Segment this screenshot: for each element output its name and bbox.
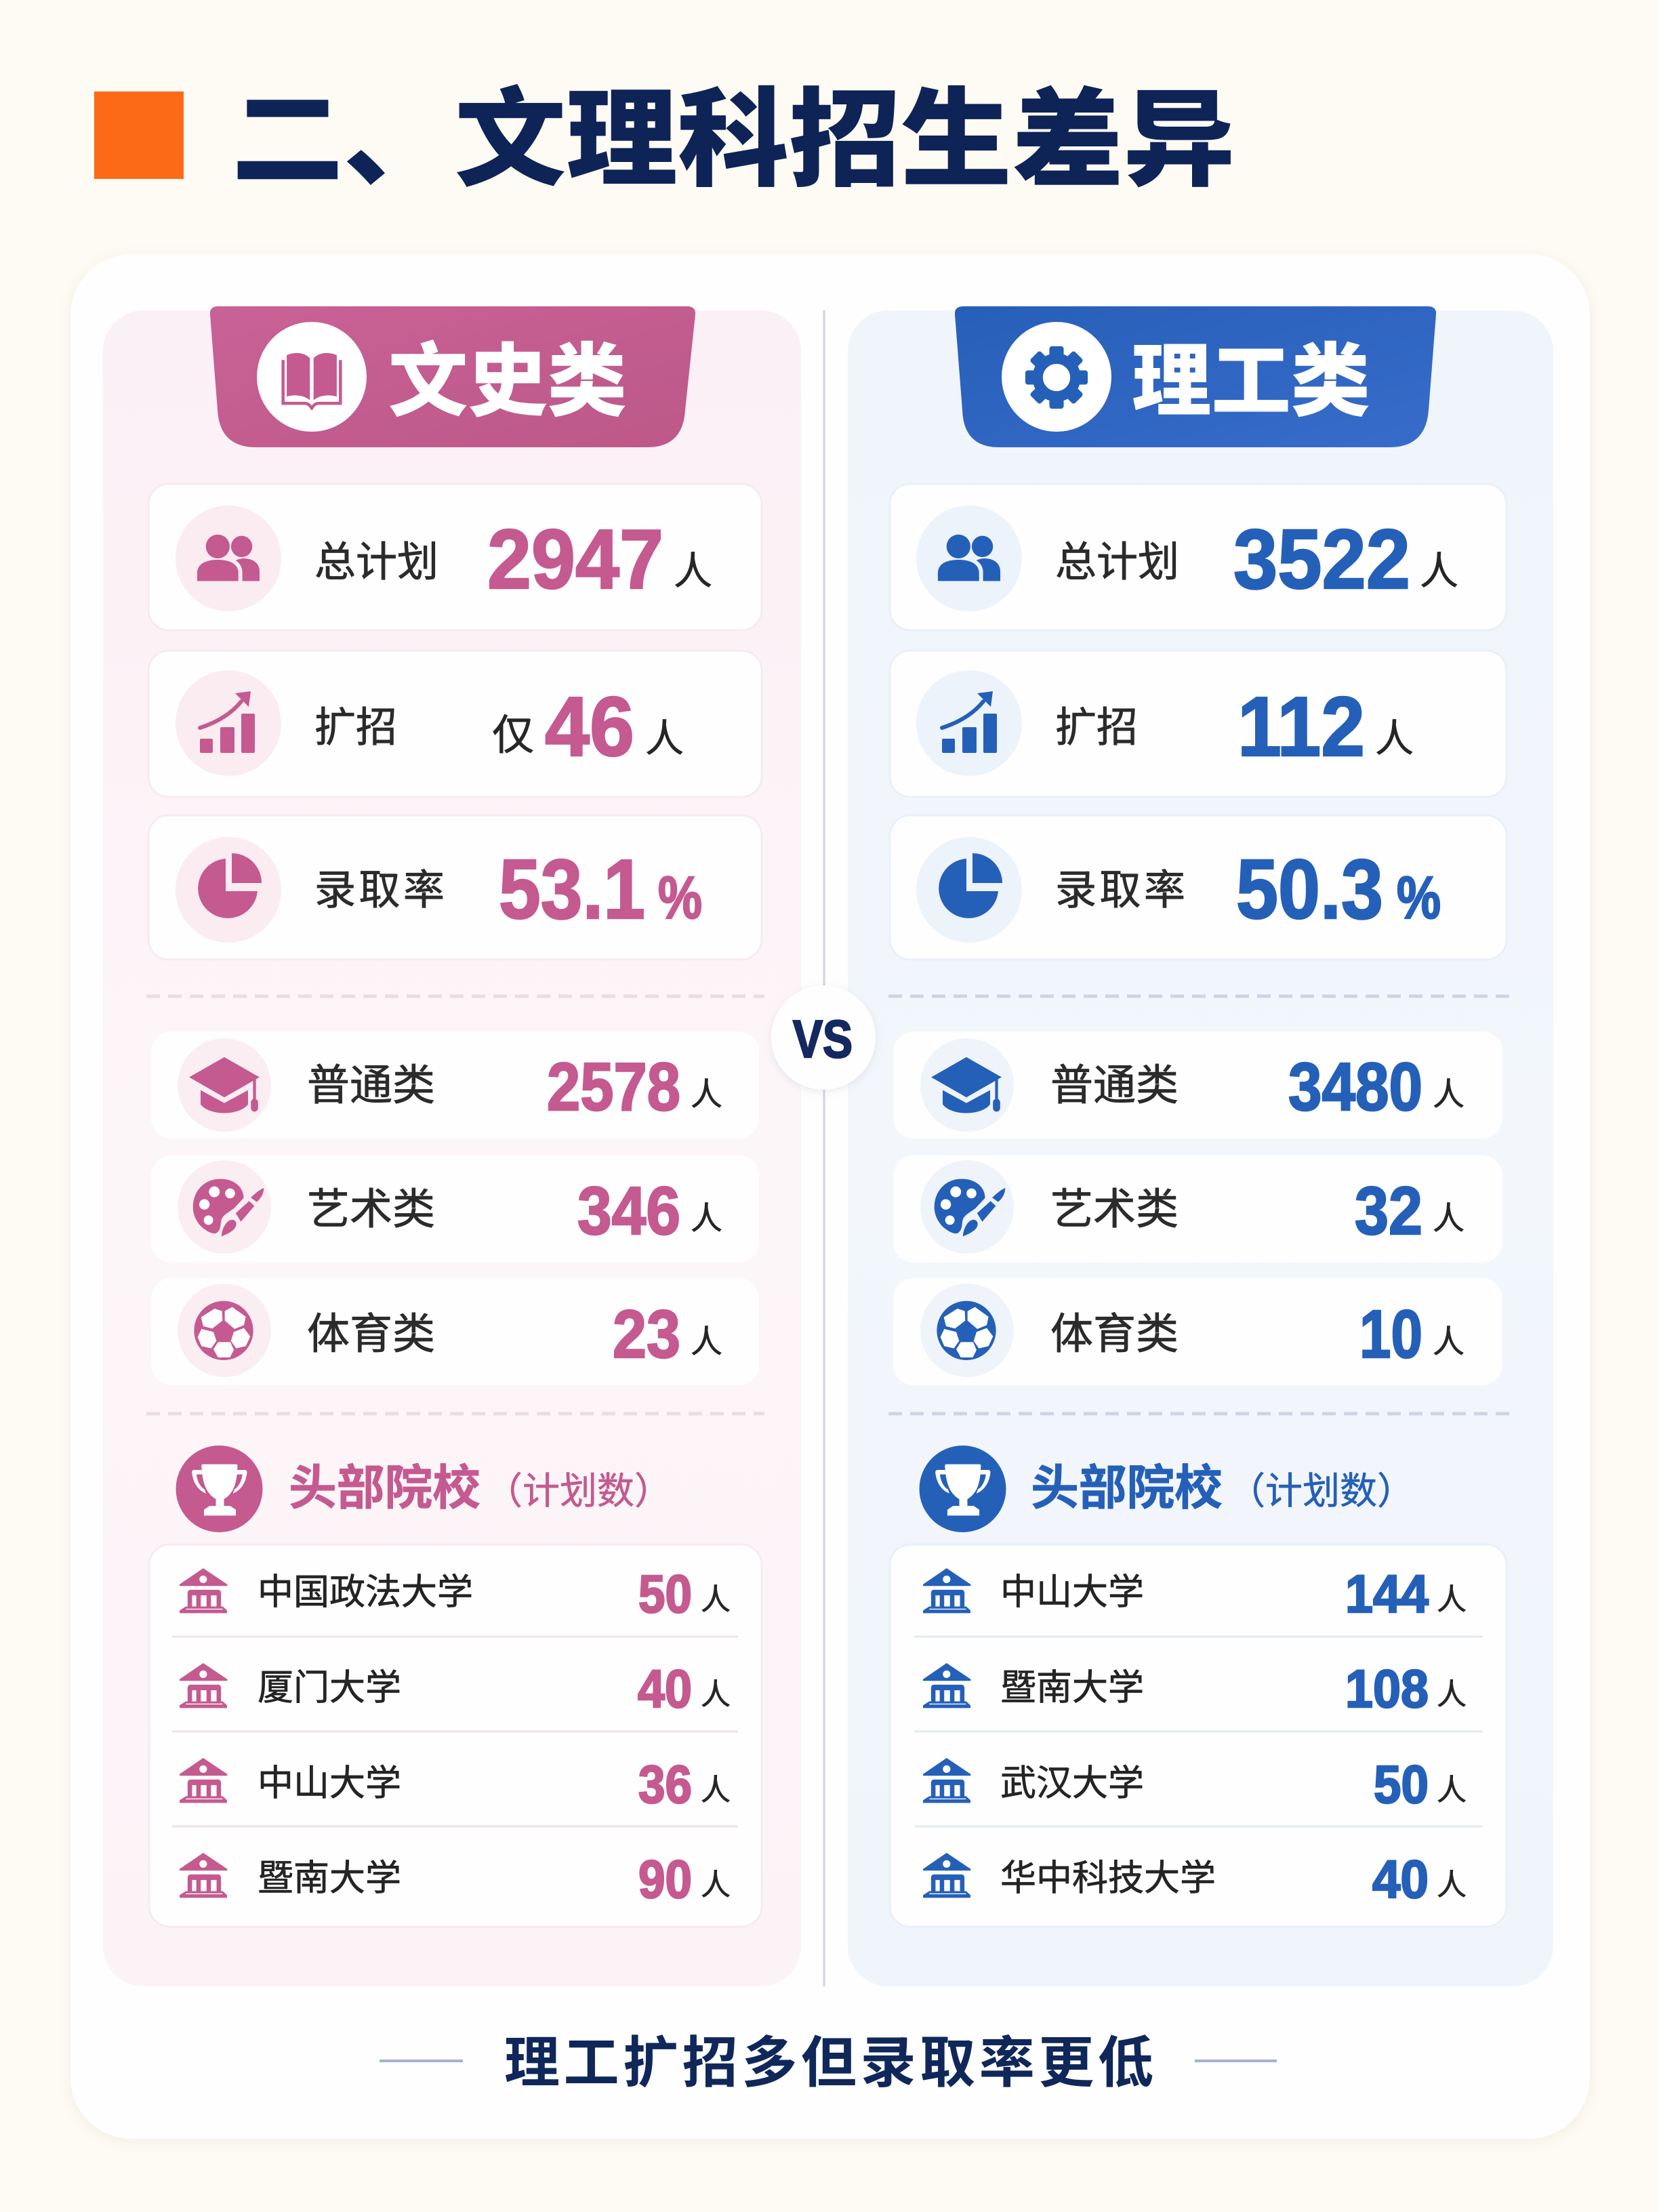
row: 体育类: [151, 1278, 759, 1385]
divider: [888, 995, 1509, 998]
stat card: 总计划: 人: [674, 550, 712, 593]
row: 艺术类: [893, 1155, 1502, 1263]
school row: 暨南大学: 90: [638, 1849, 692, 1909]
school row: 暨南大学: 人: [1437, 1678, 1467, 1711]
row: 体育类: 人: [1433, 1324, 1465, 1359]
school row: 中山大学: 人: [1437, 1583, 1467, 1616]
takeaway text: 理工扩招多但录取率更低: [504, 2032, 1153, 2094]
stat card: 总计划: 人: [1420, 550, 1458, 593]
stat card: 扩招: 仅: [492, 712, 534, 759]
school row: 中国政法大学: 中国政法大学: [258, 1572, 473, 1612]
school row: 武汉大学: 50: [1374, 1754, 1429, 1814]
stat card: 扩招: 人: [1375, 717, 1414, 760]
stat card: 扩招: 扩招: [314, 704, 397, 750]
title heading: [94, 81, 1235, 200]
subheading: 头部院校: （计划数）: [1228, 1470, 1414, 1512]
school row: 中山大学: [180, 1754, 731, 1814]
center divider line: [823, 310, 825, 1986]
school row: 武汉大学: 武汉大学: [1000, 1763, 1144, 1803]
school row: 华中科技大学: 人: [1437, 1868, 1467, 1902]
school row: 中山大学: 36: [638, 1754, 692, 1814]
stat card: 扩招: [148, 651, 762, 797]
school row: 中山大学: 中山大学: [258, 1763, 401, 1803]
row: 艺术类: [151, 1155, 759, 1263]
orange title marker: [94, 91, 184, 179]
stat card: 录取率: 录取率: [314, 867, 445, 913]
stat card: 总计划: [148, 484, 762, 630]
row: 体育类: 体育类: [1050, 1311, 1179, 1358]
school row: 暨南大学: 暨南大学: [1000, 1668, 1144, 1708]
stat card: 录取率: [148, 815, 762, 960]
stat card: 录取率: 50.3: [1236, 843, 1383, 937]
row: 艺术类: 人: [1433, 1200, 1465, 1236]
stat card: 总计划: 2947: [487, 513, 663, 607]
header tab: 文史类: [210, 306, 695, 447]
stat card: 总计划: 总计划: [1055, 539, 1179, 585]
row: 艺术类: 艺术类: [1050, 1186, 1179, 1233]
school row: 中山大学: [923, 1563, 1467, 1624]
divider: [146, 995, 764, 998]
pink panel background: [103, 310, 801, 1986]
row: 体育类: [893, 1278, 1502, 1385]
subheading: 头部院校: 头部院校: [289, 1462, 480, 1515]
row: 普通类: 2578: [547, 1049, 680, 1125]
stat card: 扩招: 扩招: [1055, 704, 1138, 750]
icon: open book: [257, 322, 367, 432]
school row: 中山大学: 中山大学: [1000, 1572, 1144, 1612]
school row: 华中科技大学: 华中科技大学: [1000, 1858, 1216, 1898]
stat card: 扩招: 112: [1237, 680, 1365, 774]
school row: 暨南大学: 108: [1345, 1658, 1429, 1719]
row: 艺术类: 346: [577, 1173, 680, 1249]
school row: 华中科技大学: 40: [1372, 1849, 1429, 1909]
row: 艺术类: 艺术类: [307, 1186, 435, 1233]
school row: 中国政法大学: 人: [701, 1583, 731, 1616]
school row: 中山大学: 144: [1345, 1563, 1429, 1624]
subheading: 头部院校: （计划数）: [485, 1470, 672, 1512]
stat card: 总计划: [890, 484, 1507, 630]
header tab: 理工类: [955, 306, 1436, 447]
stat card: 录取率: %: [1397, 864, 1441, 931]
list: 头部院校: [890, 1544, 1507, 1927]
panel: 理工类: [848, 306, 1553, 1986]
school row: 华中科技大学: [923, 1849, 1467, 1909]
school row: 厦门大学: 人: [701, 1678, 731, 1711]
subheading: 头部院校: [919, 1446, 1414, 1532]
school row: 武汉大学: 人: [1437, 1774, 1467, 1807]
row: 体育类: 23: [613, 1296, 680, 1372]
school row: 中国政法大学: [180, 1563, 731, 1624]
school row: 厦门大学: 厦门大学: [258, 1668, 401, 1708]
row: 普通类: 3480: [1288, 1049, 1422, 1125]
subheading: 头部院校: 头部院校: [1031, 1462, 1223, 1515]
VS badge: VS: [793, 1009, 853, 1069]
stat card: 录取率: [890, 815, 1507, 960]
divider: [888, 1412, 1509, 1415]
stat card: 总计划: 3522: [1233, 513, 1410, 607]
stat card: 扩招: [890, 651, 1507, 797]
stat card: 扩招: 46: [545, 680, 634, 774]
row: 艺术类: 人: [691, 1200, 722, 1236]
school row: 中山大学: 人: [701, 1774, 731, 1807]
row: 普通类: 普通类: [307, 1062, 435, 1109]
list: 头部院校: [149, 1544, 762, 1927]
stat card: 录取率: 录取率: [1055, 867, 1185, 913]
header label: 理工类: [1132, 337, 1370, 427]
stat card: 录取率: 53.1: [499, 843, 645, 937]
row: 体育类: 人: [691, 1324, 722, 1359]
stat card: 扩招: 人: [645, 717, 684, 760]
VS badge: [771, 985, 876, 1090]
title text: 二、文理科招生差异: [232, 81, 1235, 200]
row: 体育类: 10: [1359, 1296, 1422, 1372]
school row: 厦门大学: 40: [638, 1658, 692, 1719]
school row: 暨南大学: 暨南大学: [258, 1858, 401, 1898]
icon: gear: [1002, 322, 1111, 432]
row: 艺术类: 32: [1355, 1173, 1422, 1249]
stat card: 录取率: %: [658, 864, 702, 931]
school row: 厦门大学: [180, 1658, 731, 1719]
divider: [146, 1412, 764, 1415]
row: 普通类: 人: [1433, 1076, 1465, 1112]
school row: 暨南大学: [180, 1849, 731, 1909]
main card: [70, 254, 1590, 2139]
school row: 暨南大学: 人: [701, 1868, 731, 1902]
row: 体育类: 体育类: [307, 1311, 435, 1358]
blue panel background: [848, 310, 1553, 1986]
row: 普通类: [151, 1031, 759, 1139]
header label: 文史类: [388, 337, 627, 427]
panel: 文史类: [103, 306, 801, 1986]
school row: 武汉大学: [923, 1754, 1467, 1814]
subheading: 头部院校: [176, 1446, 672, 1532]
school row: 中国政法大学: 50: [638, 1563, 692, 1624]
stat card: 总计划: 总计划: [314, 539, 438, 585]
row: 普通类: [893, 1031, 1502, 1139]
row: 普通类: 人: [691, 1076, 722, 1112]
school row: 暨南大学: [923, 1658, 1467, 1719]
row: 普通类: 普通类: [1050, 1062, 1179, 1109]
